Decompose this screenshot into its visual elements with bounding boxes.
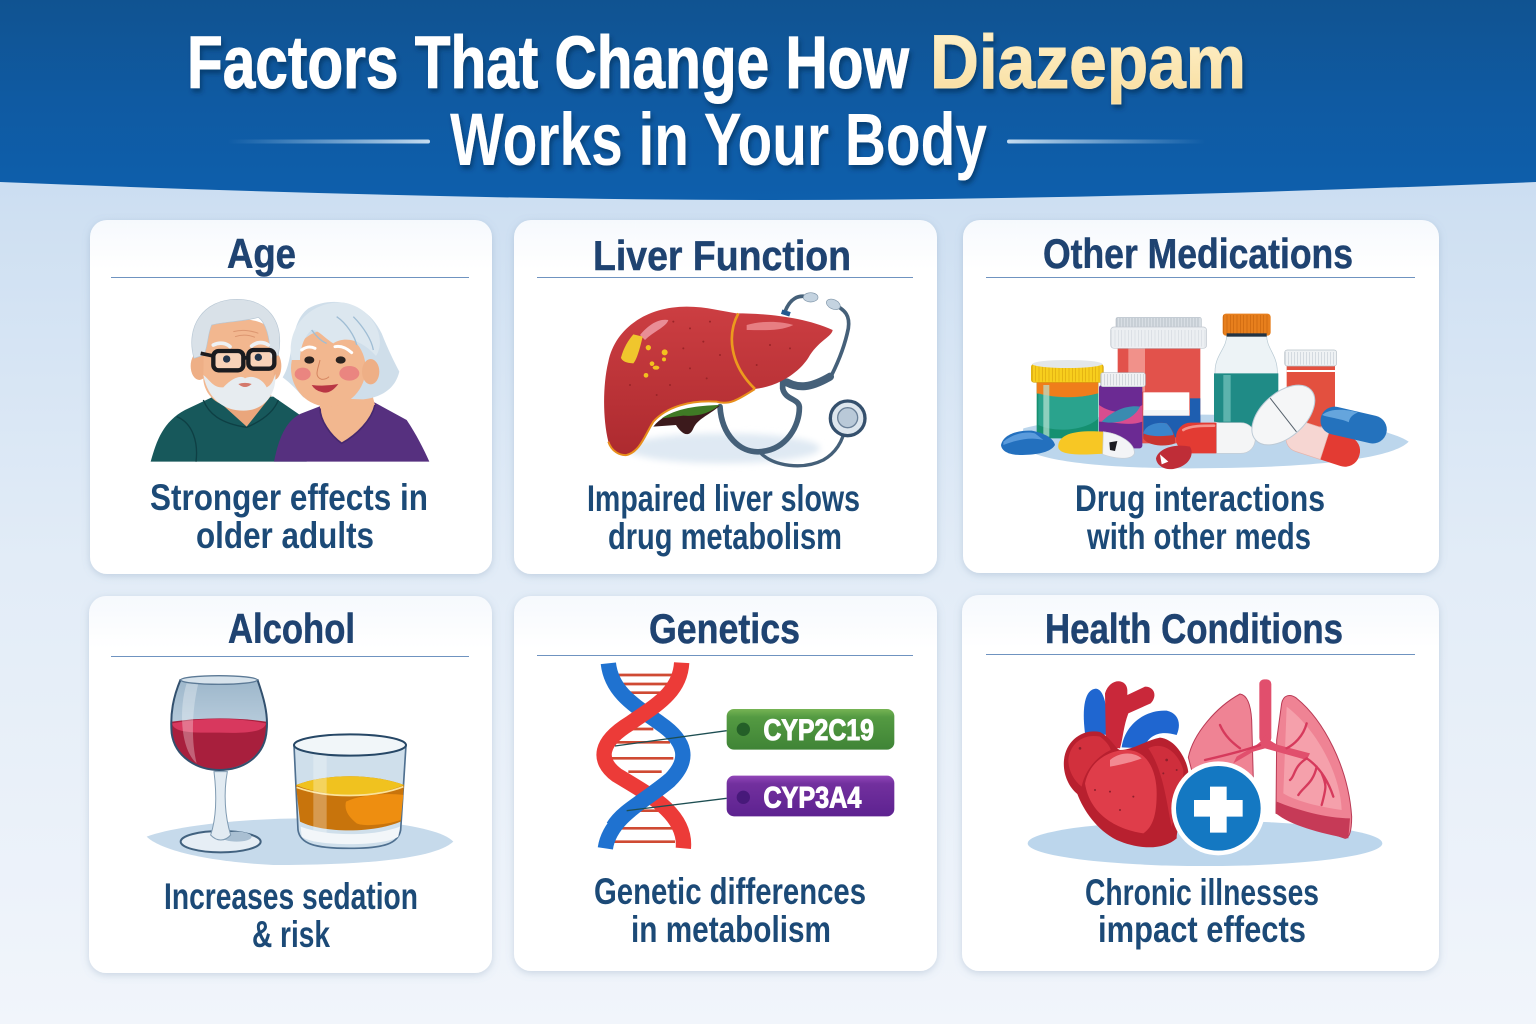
- man head: [191, 352, 208, 380]
- caption: health conditions: [1085, 872, 1319, 950]
- caption: liver function: drug metabolism: [608, 516, 842, 557]
- header banner: [0, 0, 1536, 200]
- caption: liver function: [587, 478, 860, 557]
- caption: age: Stronger effects in: [150, 477, 428, 518]
- icon: liver with stethoscope: [604, 293, 865, 466]
- caption: health conditions: Chronic illnesses: [1085, 872, 1319, 913]
- icon: DNA helix with gene tags: CYP2C19: [763, 714, 874, 747]
- heading: age: Age: [227, 230, 296, 277]
- caption: other medications: Drug interactions: [1075, 478, 1325, 519]
- heading: other medications: Other Medications: [1043, 230, 1353, 277]
- heading: liver function: Liver Function: [593, 232, 851, 279]
- panel: age: [90, 220, 492, 574]
- icon: medicine bottles and pills: [1001, 314, 1409, 471]
- heading: alcohol: Alcohol: [228, 605, 355, 652]
- panel: liver function: [514, 220, 937, 574]
- caption: other medications: with other meds: [1086, 516, 1311, 557]
- caption: age: [150, 477, 428, 556]
- caption: genetics: [594, 871, 866, 950]
- panel: health conditions: [962, 595, 1439, 971]
- woman body: [274, 400, 429, 462]
- icon: wine glass and whisky tumbler: [147, 676, 453, 865]
- heading: health conditions: Health Conditions: [1045, 605, 1343, 652]
- panel: genetics: [514, 596, 937, 971]
- title: Factors That Change How: [187, 21, 909, 104]
- icon: heart, lungs and medical cross: [1028, 679, 1382, 866]
- caption: age: older adults: [196, 515, 374, 556]
- icon: DNA helix with gene tags: [604, 663, 894, 848]
- icon: older couple: [151, 299, 429, 462]
- caption: health conditions: impact effects: [1098, 909, 1306, 950]
- icon: DNA helix with gene tags: CYP3A4: [763, 781, 862, 814]
- caption: genetics: in metabolism: [631, 909, 831, 950]
- caption: genetics: Genetic differences: [594, 871, 866, 912]
- title: [187, 20, 1246, 181]
- woman head: [283, 302, 399, 399]
- title: Works in Your Body: [450, 98, 987, 181]
- caption: liver function: Impaired liver slows: [587, 478, 860, 519]
- caption: other medications: [1075, 478, 1325, 557]
- title: Diazepam: [930, 20, 1246, 105]
- heading: genetics: Genetics: [649, 605, 800, 652]
- caption: alcohol: & risk: [252, 914, 330, 955]
- panel: other medications: [963, 220, 1439, 573]
- caption: alcohol: Increases sedation: [164, 876, 418, 917]
- panel: alcohol: [89, 596, 492, 973]
- caption: alcohol: [164, 876, 418, 955]
